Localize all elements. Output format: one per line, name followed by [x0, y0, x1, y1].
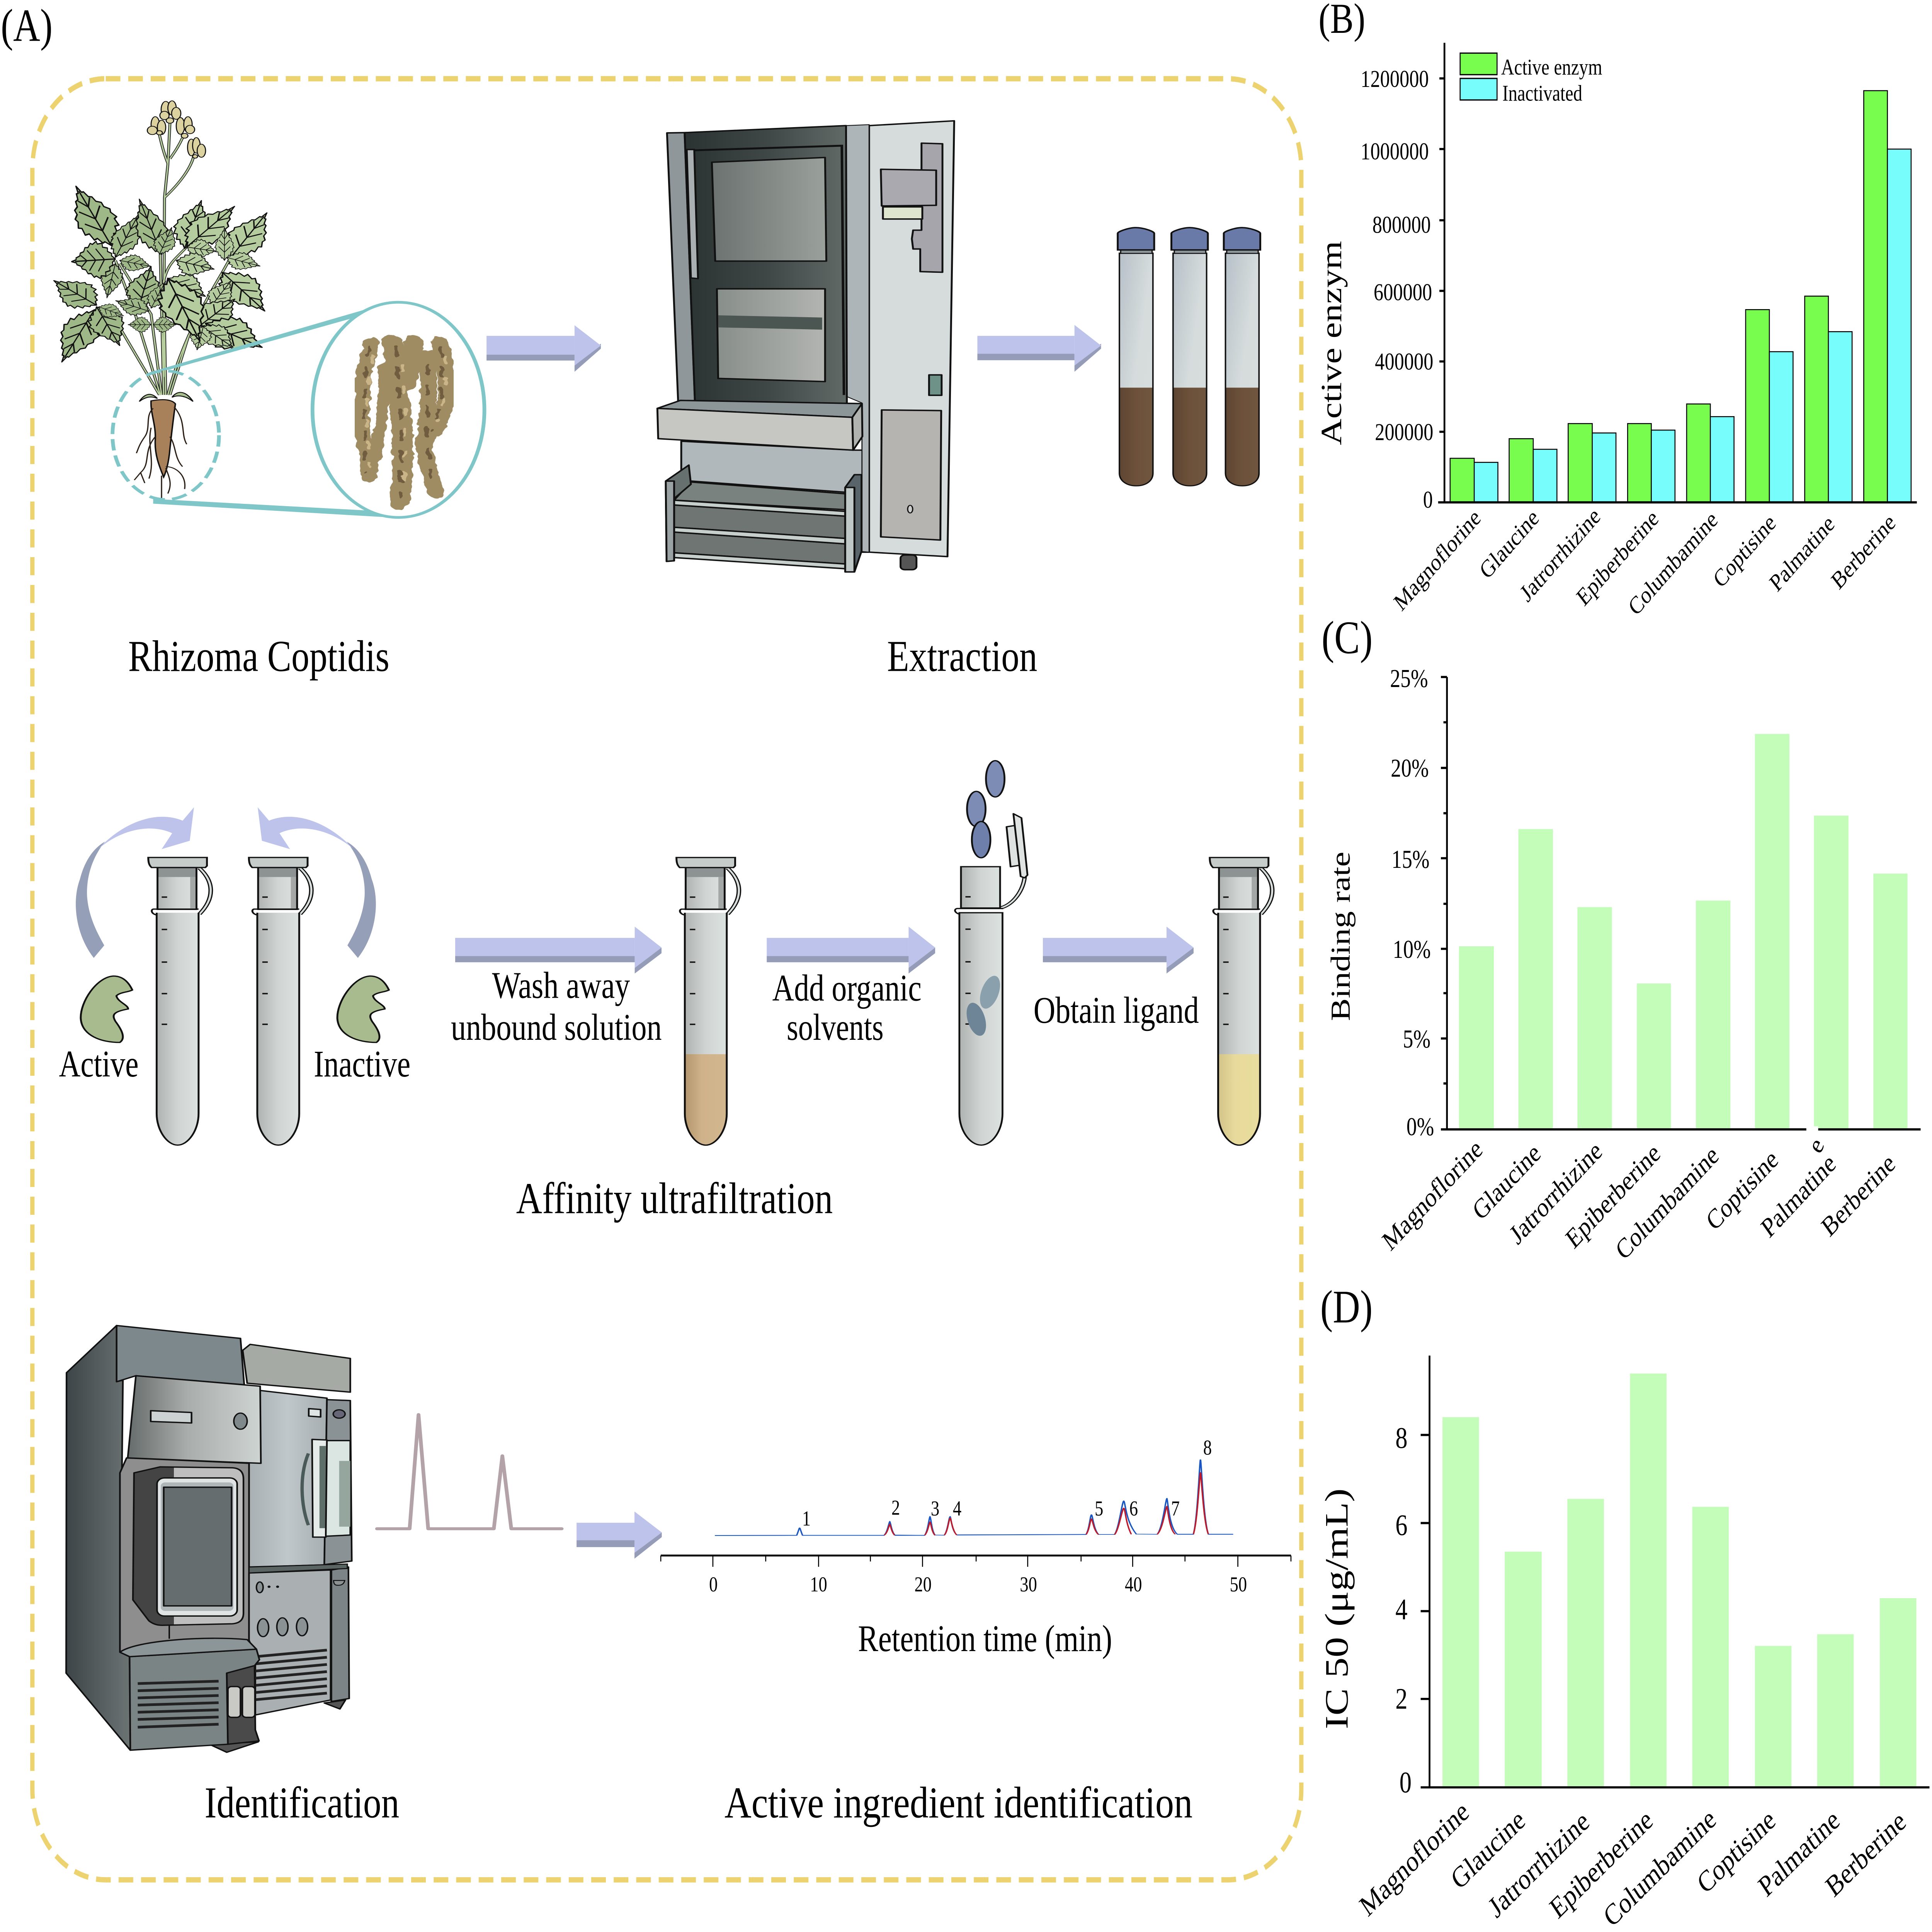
arrow: wash step: [455, 927, 662, 973]
dried rhizome: [362, 343, 447, 502]
traces: [715, 1460, 1233, 1536]
icon: Rhizoma Coptidis plant with root: [42, 101, 284, 498]
label: unbound solution: unbound solution: [451, 1007, 662, 1048]
y tick labels: 0: [1400, 1766, 1412, 1799]
label: Add organic: Add organic: [772, 968, 922, 1009]
x labels: Berberine: [1821, 1804, 1911, 1903]
peak numbers: [802, 1435, 1212, 1530]
x labels: Palmatine: [1753, 1803, 1845, 1903]
x labels: Magnoflorine: [1378, 1133, 1487, 1257]
displaced glyph patch: e: [1803, 1133, 1829, 1158]
chart: chromatogram: [661, 1435, 1291, 1660]
x labels: Palmatine: [1765, 509, 1839, 597]
x labels: Jatrorrhizine: [1483, 1804, 1594, 1924]
y tick labels: 6: [1395, 1509, 1408, 1542]
y axis title: Binding rate: [1326, 852, 1356, 1021]
x labels: Columbamine: [1599, 1802, 1721, 1932]
icon: magnifier lens with dried rhizome: [112, 302, 485, 518]
x labels: [1378, 1133, 1900, 1266]
label: Inactive: Inactive: [314, 1043, 410, 1085]
y tick labels: [1395, 1422, 1412, 1799]
y tick labels: 200000: [1375, 419, 1433, 446]
y tick labels: 0%: [1406, 1113, 1434, 1141]
x labels: Berberine: [1827, 508, 1900, 595]
tick labels: [709, 1572, 1247, 1596]
tick labels: 0: [709, 1572, 718, 1596]
peak numbers: 8: [1203, 1435, 1212, 1459]
x labels: [1355, 1795, 1911, 1932]
control module: [912, 143, 942, 272]
label: solvents: solvents: [787, 1007, 884, 1048]
peak numbers: 2: [891, 1495, 900, 1519]
y tick labels: 1200000: [1361, 66, 1429, 92]
x labels: Jatrorrhizine: [1505, 1135, 1607, 1250]
label: Active ingredient identification: Active ingredient identification: [724, 1778, 1192, 1827]
bars: [1450, 91, 1911, 502]
base leaves: [139, 393, 193, 401]
axis: [661, 1556, 1291, 1567]
y tick labels: [1390, 665, 1434, 1141]
axes: [1438, 43, 1917, 502]
label: Wash away: Wash away: [492, 965, 630, 1006]
y tick labels: 2: [1395, 1682, 1408, 1715]
x labels: Magnoflorine: [1355, 1795, 1474, 1923]
lower door: [881, 410, 941, 540]
y tick labels: 600000: [1374, 279, 1432, 306]
right vents: [255, 1650, 327, 1700]
x labels: Epiberberine: [1545, 1803, 1658, 1925]
y tick labels: 800000: [1372, 212, 1431, 238]
panel label (C): (C): [1321, 612, 1372, 663]
peak numbers: 6: [1129, 1497, 1138, 1520]
dashed root circle: [112, 371, 219, 500]
root: [151, 400, 175, 477]
flowers: [147, 101, 206, 158]
arrow: extraction to tubes: [977, 325, 1101, 372]
axis title: Retention time (min): [858, 1618, 1112, 1660]
y tick labels: 20%: [1391, 754, 1429, 782]
y tick labels: 10%: [1393, 935, 1431, 964]
y tick labels: 4: [1395, 1593, 1408, 1626]
icon: LC-MS identification instrument: [66, 1325, 352, 1752]
x labels: Glaucine: [1475, 503, 1543, 584]
icon: inactive enzyme tube with curved arrow: [249, 807, 389, 1145]
chart D: IC50 bars: [1318, 1355, 1929, 1932]
chart B: active vs inactivated grouped bars: [1315, 43, 1917, 621]
bars: [1459, 734, 1908, 1128]
tick labels: 40: [1125, 1572, 1142, 1596]
peak numbers: 5: [1095, 1497, 1103, 1520]
wheel: [901, 555, 917, 570]
y tick labels: 1000000: [1361, 138, 1429, 165]
x labels: Columbamine: [1624, 505, 1722, 621]
icon: sketched two-peak signal: [377, 1415, 562, 1529]
dissolved ligands: [976, 975, 1004, 1010]
x labels: Glaucine: [1468, 1137, 1546, 1226]
left vents: [138, 1681, 219, 1727]
y tick labels: 400000: [1375, 349, 1433, 375]
y tick labels: 25%: [1390, 665, 1428, 693]
x labels: Berberine: [1817, 1148, 1900, 1243]
arrow: add organic solvents step: [767, 927, 935, 973]
label: Obtain ligand: Obtain ligand: [1034, 990, 1199, 1031]
icon: open tube with falling ligands: [955, 761, 1027, 1145]
x labels: Palmatine: [1757, 1148, 1840, 1244]
falling ligands: [986, 761, 1005, 797]
arrow: plant to extraction: [486, 325, 601, 372]
label: Active: Active: [59, 1043, 139, 1085]
peak numbers: 3: [931, 1497, 939, 1520]
zoom connector lines: [149, 302, 401, 518]
icon: three extract tubes: [1118, 228, 1260, 486]
legend: Inactivated: [1502, 81, 1582, 106]
label: Identification: Identification: [204, 1778, 399, 1827]
icon: tube with tan solution: [677, 857, 739, 1145]
x labels: Glaucine: [1446, 1803, 1530, 1896]
lens circle: [313, 302, 485, 517]
label: Extraction: Extraction: [887, 632, 1037, 681]
icon: tube with gold ligand solution: [1210, 857, 1272, 1145]
y tick labels: 8: [1395, 1422, 1408, 1454]
arrow: signal to chromatogram: [577, 1512, 662, 1559]
y tick labels: [1361, 66, 1433, 513]
tick labels: 20: [914, 1572, 932, 1596]
peak numbers: 4: [953, 1497, 961, 1520]
tick labels: 10: [810, 1572, 827, 1596]
x labels: Coptisine: [1692, 1803, 1781, 1900]
x labels: Coptisine: [1702, 1144, 1783, 1236]
bars: [1442, 1374, 1916, 1787]
peak numbers: 1: [802, 1507, 811, 1530]
axes: [1441, 677, 1921, 1129]
tick labels: 50: [1230, 1572, 1247, 1596]
panel label (A): (A): [1, 0, 53, 51]
legend: Active enzym: [1501, 55, 1602, 80]
peak numbers: 7: [1171, 1497, 1180, 1520]
icon: active enzyme tube with curved arrow: [76, 807, 211, 1145]
x labels: Epiberberine: [1561, 1137, 1665, 1255]
arrow: obtain ligand step: [1043, 927, 1194, 973]
drawer rack: [666, 465, 862, 572]
label: Rhizoma Coptidis: Rhizoma Coptidis: [128, 632, 389, 681]
y tick labels: 5%: [1403, 1025, 1430, 1053]
leaves: [42, 180, 182, 367]
panel A: dashed workflow frame: [32, 79, 1301, 1880]
y axis title: IC 50 (μg/mL): [1318, 1488, 1355, 1729]
x labels: [1389, 502, 1900, 621]
x labels: Coptisine: [1709, 509, 1780, 593]
y tick labels: 15%: [1391, 845, 1430, 874]
x labels: Epiberberine: [1572, 504, 1663, 611]
x labels: Jatrorrhizine: [1515, 502, 1605, 607]
legend: [1460, 53, 1602, 106]
y tick labels: 0: [1423, 487, 1433, 513]
y axis title: Active enzym: [1315, 241, 1348, 445]
axes: [1421, 1355, 1929, 1787]
chart C: binding rate bars: [1326, 665, 1921, 1266]
x labels: Columbamine: [1611, 1139, 1723, 1266]
x labels: Magnoflorine: [1389, 503, 1485, 616]
panel label (D): (D): [1320, 1281, 1372, 1333]
icon: extraction machine: [657, 121, 954, 572]
tick labels: 30: [1020, 1572, 1037, 1596]
label: Affinity ultrafiltration: Affinity ultrafiltration: [516, 1173, 833, 1223]
